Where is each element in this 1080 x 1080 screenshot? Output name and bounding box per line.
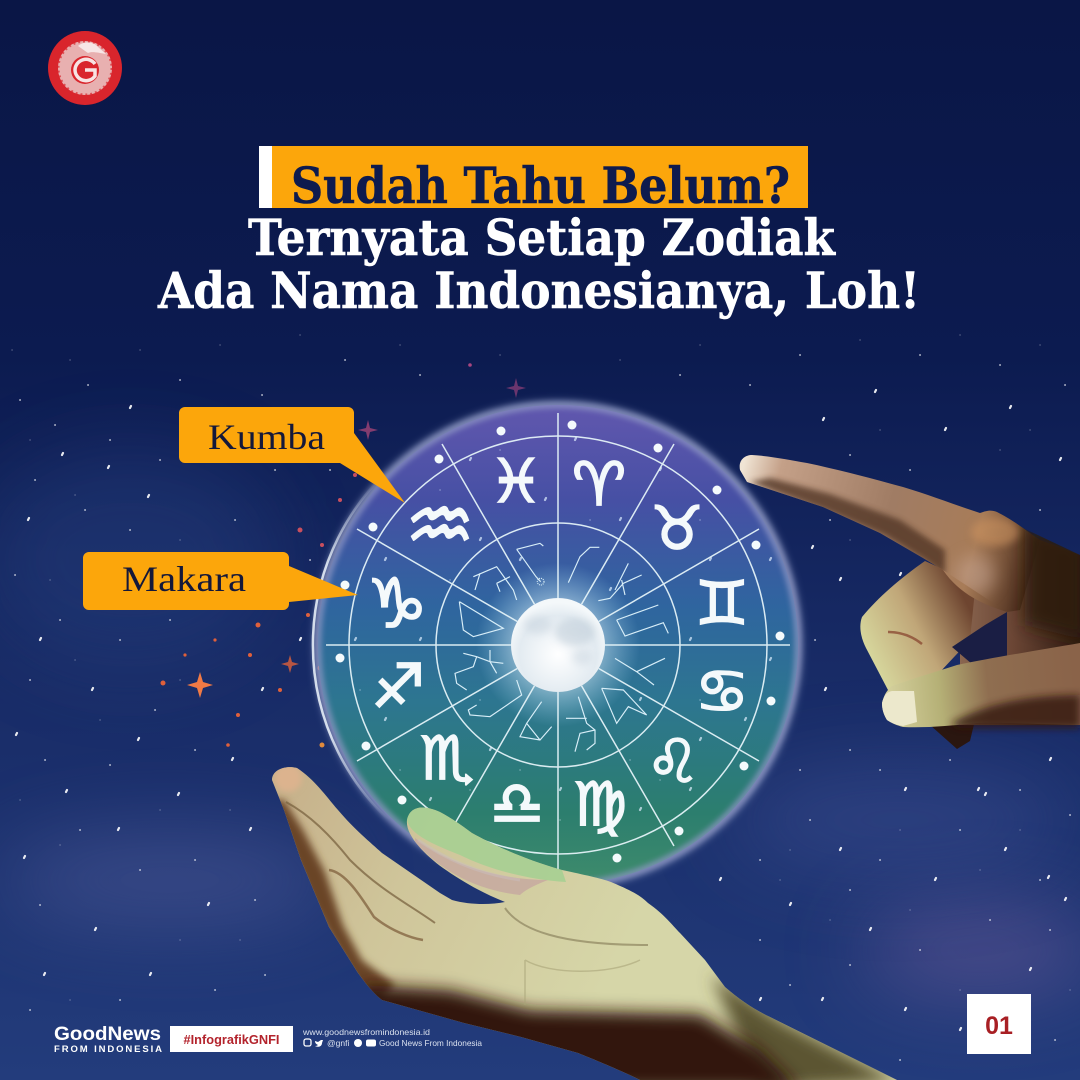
page number <box>967 994 1031 1054</box>
icon: open hand under the wheel <box>270 764 900 1080</box>
disc stars <box>355 438 771 820</box>
wrist <box>712 975 900 1080</box>
zodiac signs: ♍︎ <box>573 770 627 840</box>
zodiac signs: ♑︎ <box>367 565 427 644</box>
index finger <box>740 455 1040 612</box>
zodiac signs: ♋︎ <box>695 657 749 727</box>
footer brand: GoodNews From Indonesia: GoodNews <box>54 1024 161 1045</box>
zodiac signs: ♈︎ <box>572 450 626 520</box>
icon: pointing hand on the right <box>740 455 1080 749</box>
zodiac signs: ♊︎ <box>695 569 749 639</box>
star field <box>12 335 1070 1060</box>
ring passing over thumb <box>418 840 520 880</box>
zodiac signs: ♎︎ <box>490 769 544 839</box>
outer ring dots <box>336 420 784 862</box>
title: Ada Nama Indonesianya, Loh! <box>157 261 920 320</box>
wheel lines <box>326 413 790 877</box>
title: Ternyata Setiap Zodiak <box>248 208 836 267</box>
callout: Makara <box>83 552 358 610</box>
zodiac signs: ♌︎ <box>646 727 700 797</box>
fingertip <box>274 764 302 792</box>
callout: Kumba: Kumba <box>208 417 325 457</box>
moon <box>511 598 605 692</box>
sparks: red and orange dust left of the wheel <box>160 363 526 748</box>
center glow <box>476 563 640 727</box>
thumb shadow <box>950 695 1080 728</box>
footer brand: GoodNews From Indonesia <box>54 1024 162 1055</box>
callout: Makara: Makara <box>122 559 246 599</box>
footer links and social icons <box>302 1027 482 1048</box>
constellations <box>455 543 668 752</box>
hashtag badge <box>170 1026 293 1052</box>
footer links and social icons: Good News From Indonesia <box>379 1038 482 1048</box>
thumb nail <box>882 691 917 726</box>
title <box>157 146 920 320</box>
zodiac signs <box>367 447 749 840</box>
thumb tint <box>407 807 566 882</box>
page number: 01 <box>985 1012 1013 1040</box>
gap between fingers <box>952 612 1007 664</box>
hand left shadow <box>270 800 395 1010</box>
thumb <box>882 643 1080 727</box>
callout: Kumba <box>179 407 405 503</box>
zodiac signs: ♏︎ <box>420 724 474 794</box>
zodiac wheel <box>313 400 803 890</box>
footer links and social icons: www.goodnewsfromindonesia.id <box>302 1027 430 1037</box>
zodiac signs: ♒︎ <box>405 481 475 571</box>
index shading <box>750 478 1080 640</box>
back of hand <box>960 525 1080 725</box>
footer brand: GoodNews From Indonesia: FROM INDONESIA <box>54 1044 162 1055</box>
bottom shadow <box>350 985 800 1080</box>
title highlight bar <box>259 146 808 208</box>
footer links and social icons: @gnfi <box>327 1038 349 1048</box>
zodiac signs: ♉︎ <box>650 494 704 564</box>
finger creases <box>286 802 435 923</box>
hashtag badge: #InfografikGNFI <box>184 1032 280 1047</box>
palm nub <box>930 720 975 749</box>
zodiac signs: ♓︎ <box>489 447 543 517</box>
curled fingers <box>860 561 975 690</box>
title: Sudah Tahu Belum? <box>291 156 790 215</box>
zodiac signs: ♐︎ <box>371 652 425 722</box>
logo <box>48 31 122 105</box>
